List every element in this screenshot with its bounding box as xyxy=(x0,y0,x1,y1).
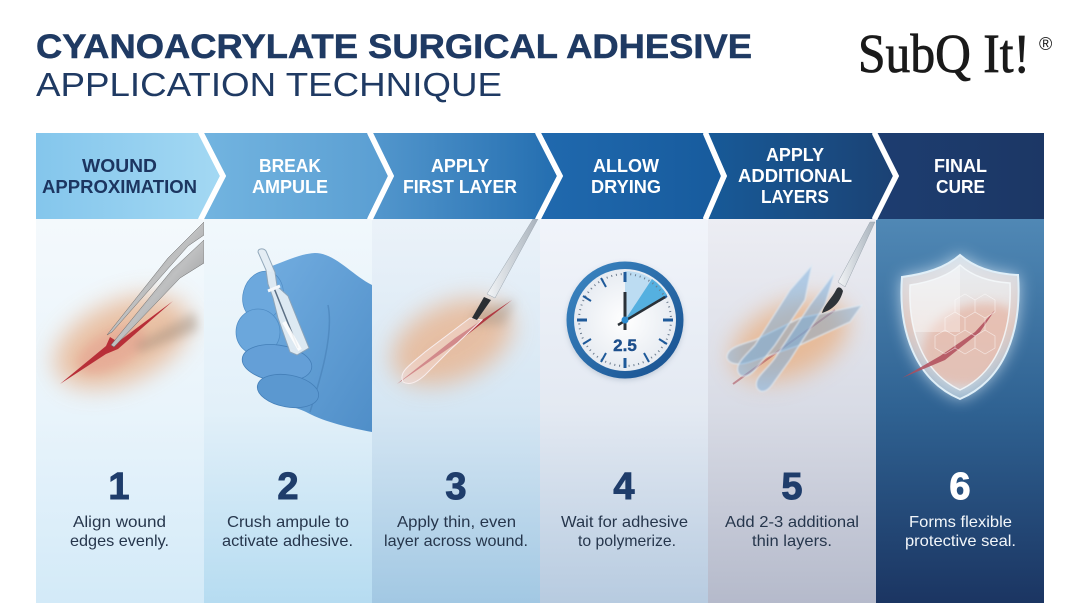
step number 2: 2 xyxy=(277,466,299,508)
step number 4: 4 xyxy=(613,466,635,508)
step number 3: 3 xyxy=(445,466,467,508)
logo: SubQ It!: ® xyxy=(1039,34,1052,54)
illustration: gloved hand holding ampule xyxy=(236,249,372,432)
heading: APPLY xyxy=(766,145,824,165)
heading: WOUND xyxy=(82,156,157,176)
description: to polymerize. xyxy=(578,533,676,550)
heading xyxy=(934,156,987,197)
description: Crush ampule to xyxy=(227,514,349,531)
heading: DRYING xyxy=(591,177,661,197)
description xyxy=(384,514,528,550)
description: thin layers. xyxy=(752,533,832,550)
heading xyxy=(738,145,852,207)
heading: FIRST LAYER xyxy=(403,177,517,197)
illustration: wound with tweezers xyxy=(40,222,204,408)
description: Align wound xyxy=(73,514,166,531)
heading xyxy=(591,156,661,197)
heading xyxy=(42,156,197,197)
description: edges evenly. xyxy=(70,533,169,550)
description: layer across wound. xyxy=(384,533,528,550)
heading xyxy=(403,156,517,197)
description: protective seal. xyxy=(905,533,1016,550)
step number 6: 6 xyxy=(949,466,971,508)
logo: SubQ It!: SubQ It! xyxy=(858,23,1030,84)
heading: APPROXIMATION xyxy=(42,177,197,197)
title xyxy=(36,28,752,103)
heading xyxy=(252,156,328,197)
panel: step 4 allow drying xyxy=(540,133,721,603)
description xyxy=(561,514,688,550)
heading: AMPULE xyxy=(252,177,328,197)
heading: FINAL xyxy=(934,156,987,176)
description xyxy=(905,514,1016,550)
heading: ADDITIONAL xyxy=(738,166,852,186)
description: activate adhesive. xyxy=(222,533,353,550)
step number 5: 5 xyxy=(781,466,803,508)
arrows: white chevron separators between steps xyxy=(201,133,896,219)
title: CYANOACRYLATE SURGICAL ADHESIVE xyxy=(36,28,752,66)
panel: step 1 wound approximation xyxy=(36,133,220,603)
heading: APPLY xyxy=(431,156,489,176)
step number 1: 1 xyxy=(108,466,130,508)
icon: glass shield over sealed wound xyxy=(901,255,1040,401)
illustration: additional translucent layers xyxy=(719,222,875,398)
heading: LAYERS xyxy=(761,187,829,207)
panel: step 2 break ampule xyxy=(204,133,388,603)
title: APPLICATION TECHNIQUE xyxy=(36,66,502,103)
description: Wait for adhesive xyxy=(561,514,688,531)
description: Apply thin, even xyxy=(397,514,516,531)
panel: step 6 final cure xyxy=(876,133,1044,603)
icon: clock showing 2.5 xyxy=(566,262,684,380)
description: Add 2-3 additional xyxy=(725,514,859,531)
heading: BREAK xyxy=(259,156,321,176)
illustration: brush applying first layer xyxy=(378,219,538,403)
icon: clock showing 2.5: 2.5 xyxy=(613,336,637,355)
description: Forms flexible xyxy=(909,514,1012,531)
description xyxy=(725,514,859,550)
panel: step 5 apply additional layers xyxy=(708,133,893,603)
description xyxy=(70,514,169,550)
heading: CURE xyxy=(936,177,985,197)
panel: step 3 apply first layer xyxy=(372,133,557,603)
heading: ALLOW xyxy=(593,156,659,176)
description xyxy=(222,514,353,550)
